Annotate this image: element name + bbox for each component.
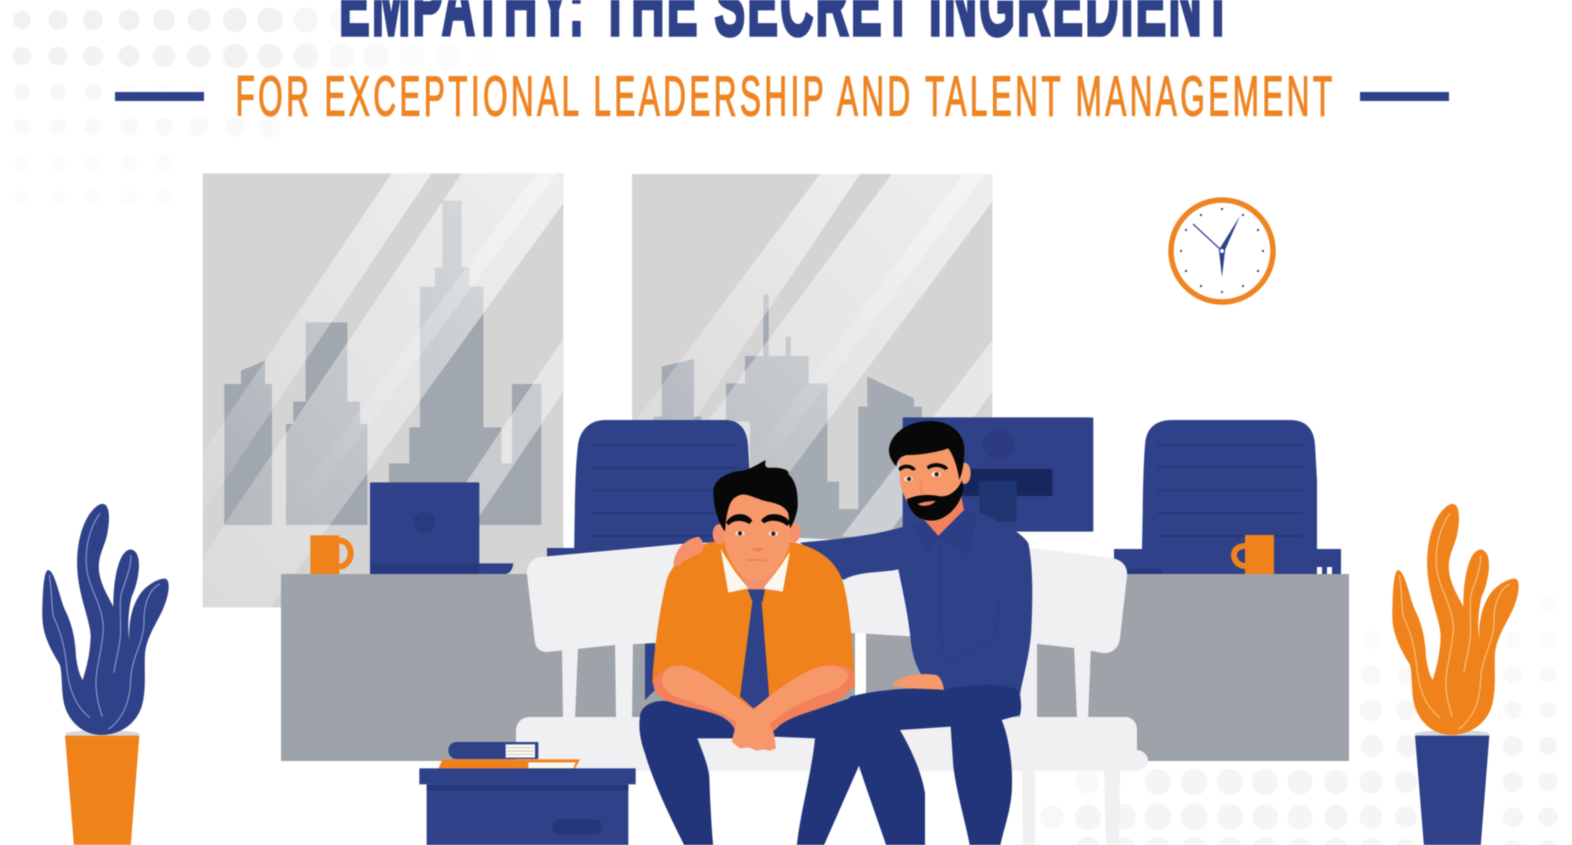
background dots: top left [13,8,496,205]
orange mug left [310,535,351,574]
divider line left [115,92,204,101]
tie [740,589,769,708]
hair [713,460,798,532]
orange shirt [652,542,855,710]
bench backrest [527,538,1127,653]
hair [889,421,964,480]
neck [922,490,964,536]
clasped hands [732,708,776,751]
office desk [281,574,1349,761]
eyebrows [726,514,791,526]
right window with skyline [632,174,993,540]
navy book [448,742,538,759]
bench [516,538,1148,845]
forearms [653,666,753,730]
drawer [427,784,628,845]
monitor behind bearded man [903,417,1093,532]
nose [920,480,924,495]
laptop on desk [370,482,513,574]
sad man in orange shirt [639,460,873,845]
hand on knee [892,674,944,690]
orange book [438,759,580,768]
left window with skyline [203,173,563,607]
eyes [904,476,913,482]
bench back slats [562,640,1091,720]
bench seat [516,717,1148,771]
bearded comforting man [833,421,1021,845]
potted plant left [42,504,169,845]
neck and collar [733,560,780,591]
beard [907,480,963,521]
trousers [833,685,1021,845]
nose and mouth [751,548,764,552]
head [959,463,971,484]
comforting hand on shoulder [673,537,703,567]
bedside drawer with books [419,742,636,845]
bench front legs [1022,771,1120,845]
background dots: bottom right [1040,596,1558,845]
collar [912,512,977,555]
divider line right [1360,92,1449,101]
right office chair [1114,420,1341,574]
white gap and navy chair base behind bench [645,633,866,700]
orange mug right [1234,535,1274,574]
trousers [639,701,735,845]
head [713,524,726,544]
left office chair [547,420,750,574]
eyes [735,531,745,536]
wall clock [1171,200,1273,302]
eyebrows [898,463,948,471]
bearded man shirt and arm [800,512,1032,693]
potted plant right [1392,504,1519,845]
